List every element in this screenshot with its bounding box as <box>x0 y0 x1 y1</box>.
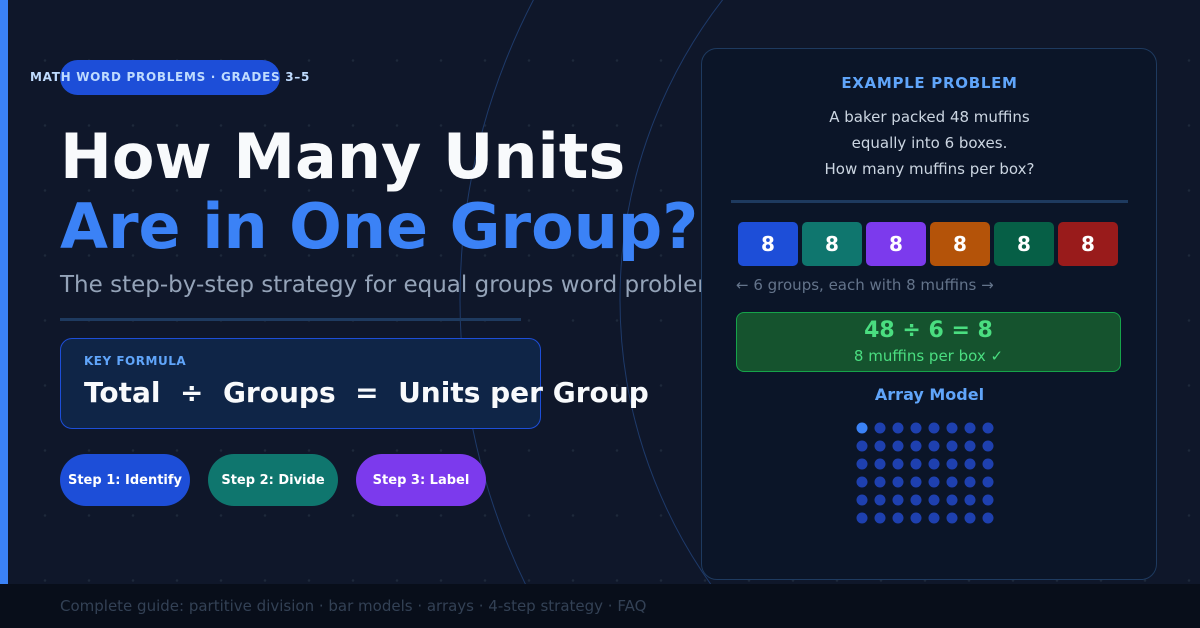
panel: example problem: 48 ÷ 6 = 8 <box>864 318 993 343</box>
panel: example problem: 8 <box>889 232 903 256</box>
formula box: Total ÷ Groups = Units per Group <box>84 376 649 409</box>
formula box <box>60 338 541 429</box>
panel: example problem: 8 <box>1081 232 1095 256</box>
title: How Many Units <box>60 120 625 193</box>
title <box>60 120 698 263</box>
panel: example problem: A baker packed 48 muffins <box>829 108 1030 126</box>
panel: example problem: ← 6 groups, each with 8 muffins → <box>736 276 994 294</box>
subtitle: The step-by-step strategy for equal groups word problems <box>60 272 732 298</box>
panel: example problem: 8 <box>953 232 967 256</box>
panel: example problem: 8 <box>1017 232 1031 256</box>
footer <box>0 584 1200 628</box>
category pill <box>30 60 310 95</box>
footer: Complete guide: partitive division · bar models · arrays · 4-step strategy · FAQ <box>60 597 646 615</box>
panel: example problem: EXAMPLE PROBLEM <box>841 74 1018 92</box>
formula box: KEY FORMULA <box>84 354 186 368</box>
panel: example problem: equally into 6 boxes. <box>852 134 1007 152</box>
panel: example problem: How many muffins per box? <box>825 160 1034 178</box>
category pill: MATH WORD PROBLEMS · GRADES 3–5 <box>30 70 310 84</box>
steps <box>60 454 486 506</box>
panel: example problem <box>701 48 1157 580</box>
steps: Step 2: Divide <box>221 472 325 488</box>
title: Are in One Group? <box>60 190 698 263</box>
panel: example problem: Array Model <box>875 385 984 404</box>
panel: example problem: 8 muffins per box ✓ <box>854 347 1003 365</box>
steps: Step 1: Identify <box>68 472 182 488</box>
panel: example problem: 8 <box>825 232 839 256</box>
steps: Step 3: Label <box>373 472 469 488</box>
panel: example problem: 8 <box>761 232 775 256</box>
